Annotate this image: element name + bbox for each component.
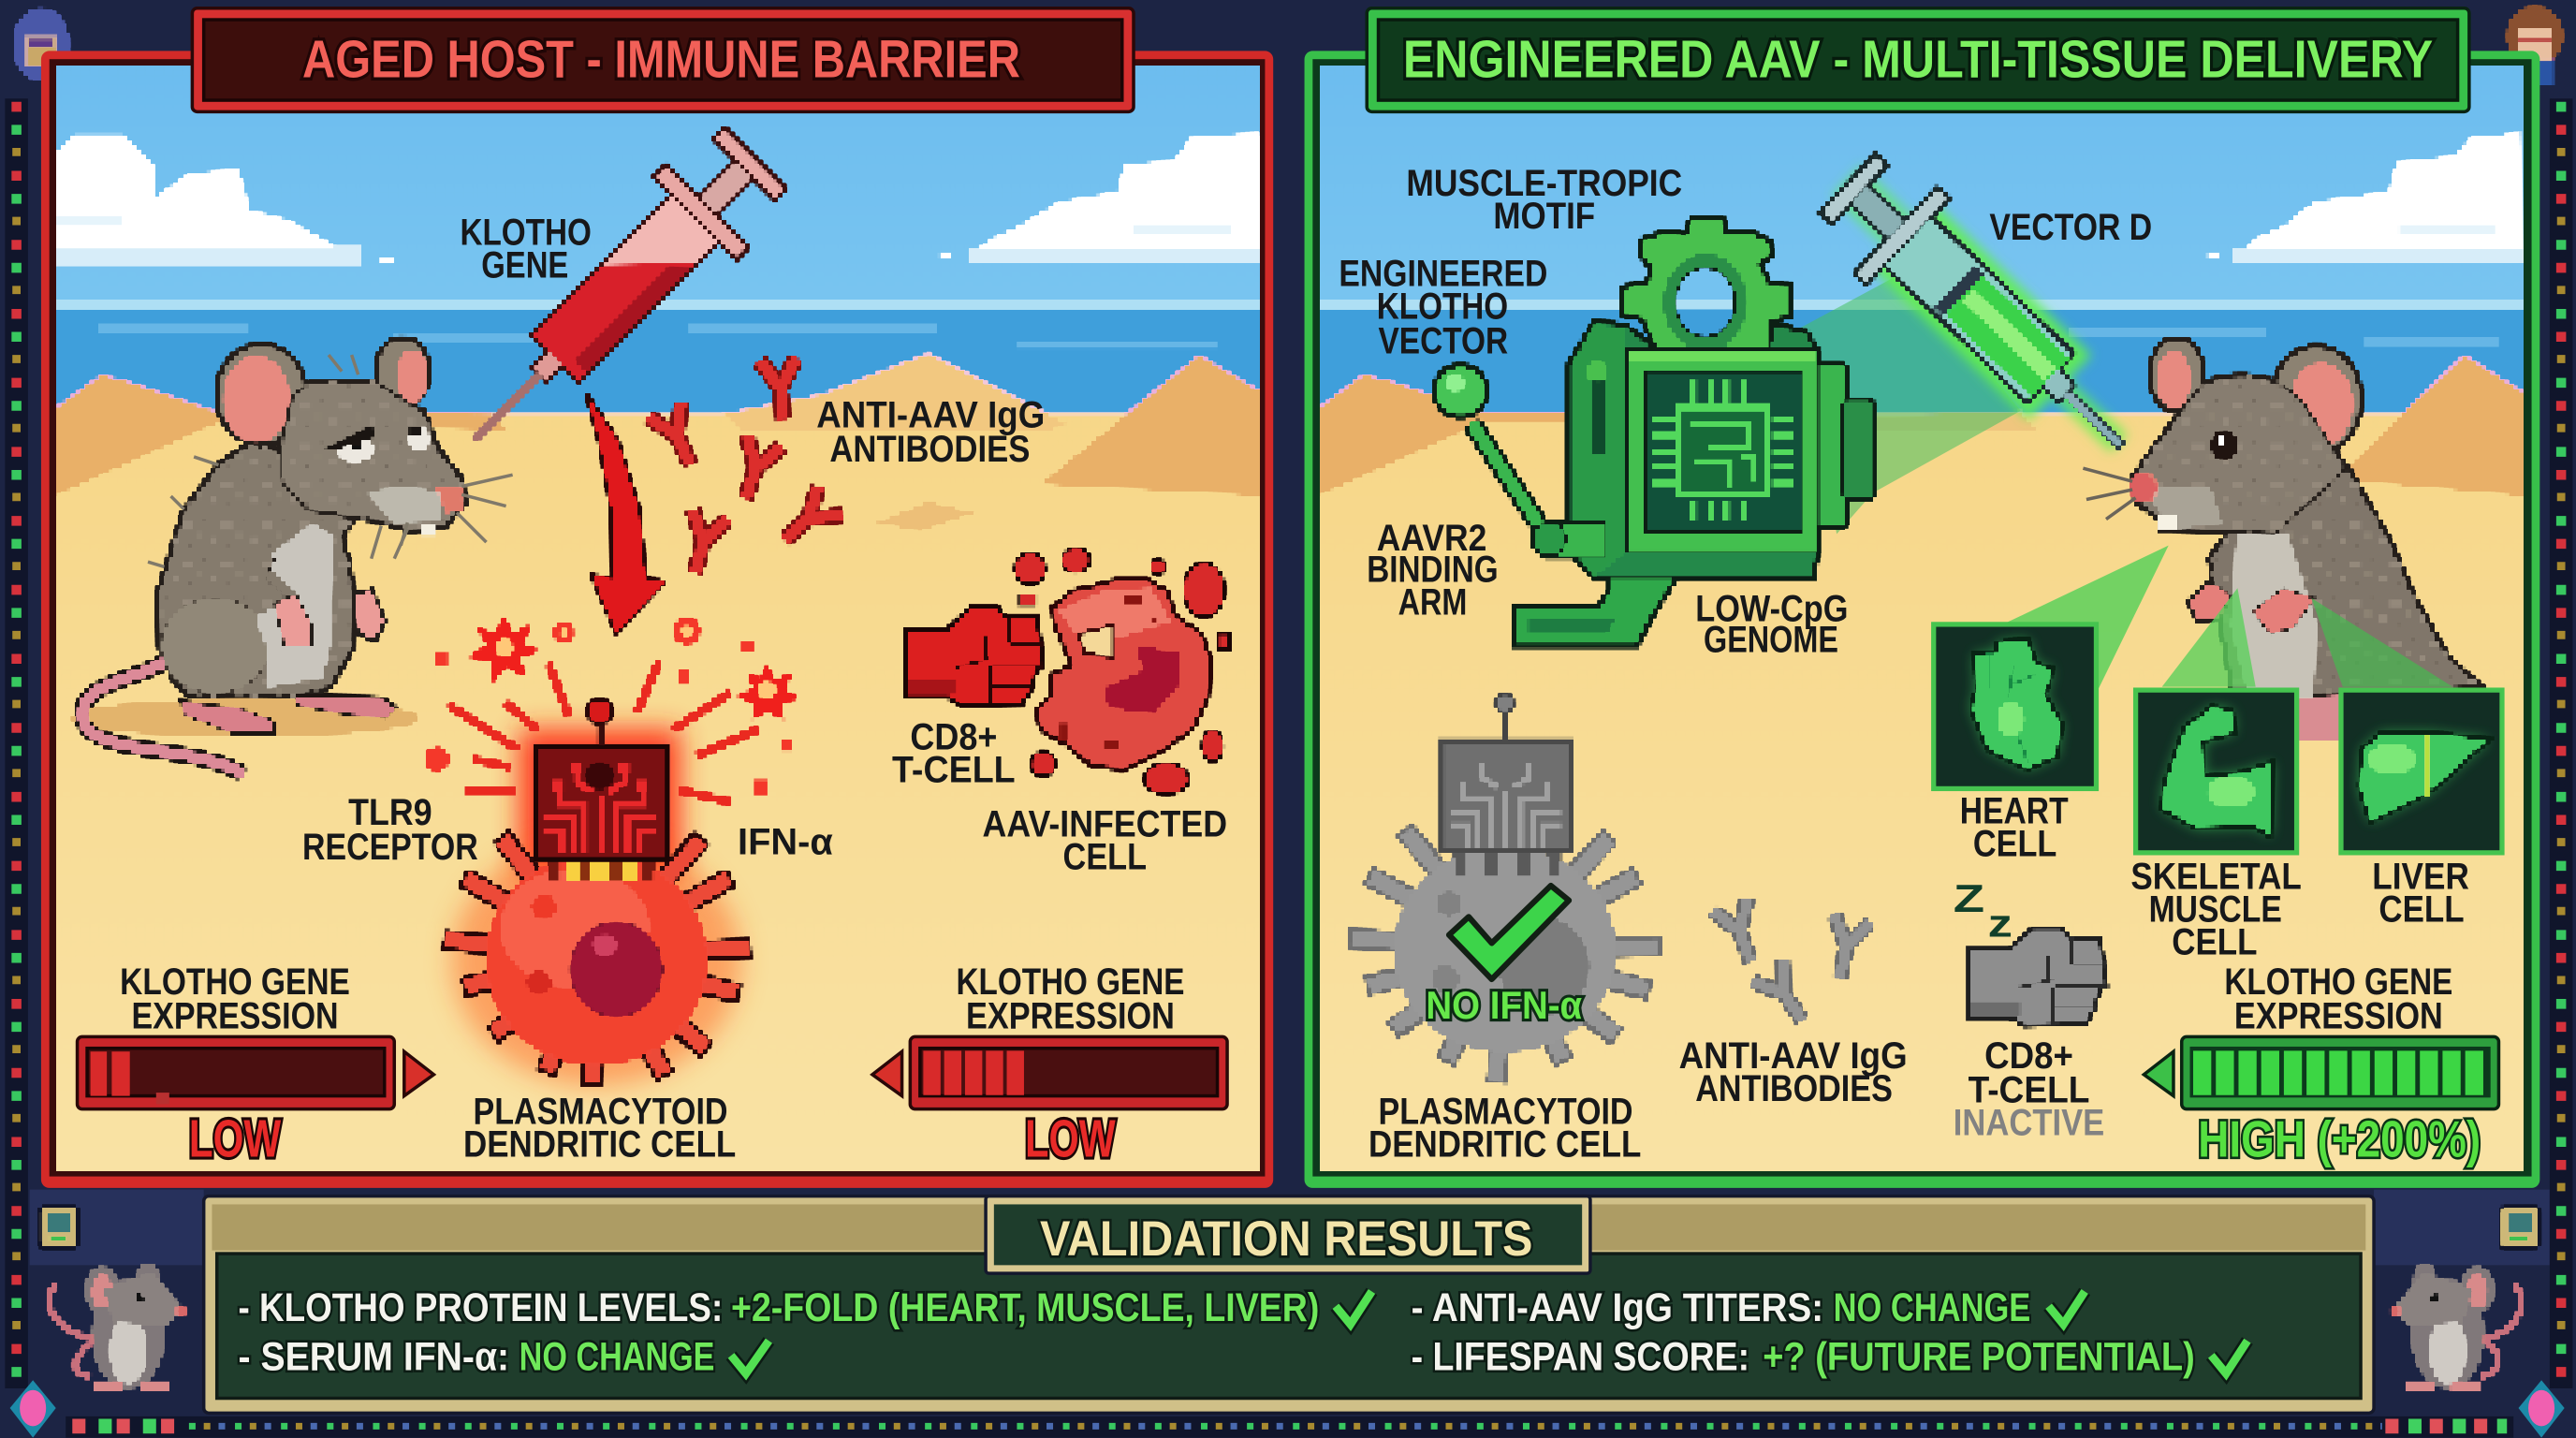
labels: engineered panel [1339, 163, 2481, 1168]
gray chip [1442, 695, 1571, 851]
bottom LED strip [66, 1416, 2513, 1438]
labels: engineered panel: DENDRITIC CELL [1368, 1124, 1641, 1166]
panel frame: left [41, 51, 1273, 1188]
labels: engineered panel: ANTIBODIES [1695, 1068, 1893, 1109]
labels: aged panel: RECEPTOR [302, 827, 478, 868]
heading plate [986, 1196, 1590, 1273]
labels: engineered panel: MUSCLE [2149, 889, 2282, 931]
row: serum IFN-alpha: - SERUM IFN-α: [239, 1335, 509, 1380]
icon: gray dendritic cell [1349, 695, 1661, 1083]
beams: rat to organs [1999, 546, 2169, 694]
labels: engineered panel: KLOTHO GENE [2224, 961, 2452, 1003]
gear [1623, 217, 1789, 352]
row: Klotho protein levels: +2-FOLD (HEART, MUSCLE, LIVER) [731, 1285, 1319, 1330]
avatar: top left [13, 8, 69, 81]
labels: engineered panel: AAVR2 [1377, 518, 1486, 559]
labels: aged panel: LOW [189, 1109, 281, 1168]
labels: engineered panel: CELL [2378, 889, 2465, 931]
icon: green syringe [1808, 141, 2162, 488]
icon: aged rat [72, 339, 465, 774]
heading plate: VALIDATION RESULTS [1040, 1211, 1532, 1267]
scene: left beach background [56, 66, 1260, 1171]
scene: right beach background [1319, 66, 2522, 1171]
labels: aged panel: KLOTHO GENE [956, 961, 1184, 1003]
arrow: curved red [587, 394, 666, 633]
panel: engineered AAV [1305, 51, 2539, 1188]
side boxes [30, 1190, 2550, 1265]
labels: engineered panel: VECTOR D [1989, 207, 2152, 248]
row: anti-AAV IgG titers: - ANTI-AAV IgG TITERS: [1412, 1285, 1823, 1330]
labels: aged panel: ANTI-AAV IgG [816, 394, 1045, 435]
icon: red antibodies [649, 359, 842, 577]
sparks [426, 618, 798, 794]
beams: lower rat to organs [2162, 588, 2452, 687]
labels: engineered panel: BINDING [1367, 549, 1499, 590]
icon: red plasmacytoid dendritic cell [426, 618, 798, 1086]
title: aged host [192, 8, 1134, 111]
labels: engineered panel: LIVER [2372, 856, 2469, 897]
right LED strip [2550, 98, 2572, 1388]
labels: aged panel: ANTIBODIES [829, 429, 1030, 470]
labels: engineered panel: HEART [1960, 790, 2069, 831]
row: lifespan score: +? (FUTURE POTENTIAL) [1763, 1335, 2195, 1380]
row: serum IFN-alpha [239, 1335, 768, 1380]
icon: red syringe [434, 118, 796, 479]
labels: engineered panel: CD8+ [1984, 1035, 2073, 1077]
labels: engineered panel: HIGH (+200%) [2198, 1111, 2481, 1168]
row: serum IFN-alpha: NO CHANGE [520, 1335, 714, 1380]
labels: engineered panel: PLASMACYTOID [1379, 1091, 1633, 1132]
labels: engineered panel: Z [1954, 876, 1984, 920]
labels: engineered panel: EXPRESSION [2234, 996, 2443, 1037]
bar: left Klotho expression [78, 1036, 433, 1109]
labels: engineered panel: MOTIF [1493, 196, 1595, 237]
labels: engineered panel: SKELETAL [2130, 856, 2302, 897]
panel: validation results [204, 1196, 2374, 1413]
icon: mini rat left [50, 1264, 185, 1392]
labels: aged panel: KLOTHO [460, 212, 592, 253]
labels: aged panel: TLR9 [348, 792, 432, 833]
row: anti-AAV IgG titers: NO CHANGE [1834, 1285, 2030, 1330]
labels: aged panel: T-CELL [892, 749, 1016, 790]
panel body [204, 1196, 2374, 1413]
green check [1449, 886, 1569, 979]
labels: aged panel: KLOTHO GENE [120, 961, 350, 1003]
labels: aged panel: IFN-α [738, 822, 833, 863]
labels: engineered panel: VECTOR [1379, 320, 1508, 361]
icon: gem left [10, 1380, 56, 1438]
tile: heart [1934, 624, 2096, 788]
syringe glow [1847, 181, 2119, 444]
whiskers: aged rat [148, 355, 513, 566]
icon: gem right [2519, 1380, 2565, 1438]
labels: engineered panel: LOW-CpG [1695, 588, 1848, 629]
icon: gray fist inactive T-cell [1969, 929, 2106, 1025]
cell body [444, 836, 751, 1086]
labels: aged panel: AAV-INFECTED [983, 803, 1227, 844]
panel: aged host [41, 51, 1273, 1188]
labels: engineered panel: GENOME [1704, 620, 1838, 661]
labels: engineered panel: ARM [1398, 581, 1467, 623]
labels: engineered panel: KLOTHO [1377, 286, 1508, 327]
chip [1679, 407, 1767, 494]
whiskers: healthy rat [2083, 468, 2136, 520]
right cylinder [1814, 365, 1847, 527]
foot [1515, 575, 1677, 646]
row: lifespan score: - LIFESPAN SCORE: [1412, 1335, 1749, 1380]
labels: engineered panel: CELL [2172, 922, 2257, 963]
glow [452, 729, 741, 1086]
labels: aged panel: CD8+ [910, 716, 997, 757]
icon: gray antibodies [1713, 899, 1870, 1030]
labels: aged panel: DENDRITIC CELL [463, 1124, 736, 1166]
label: no IFN-alpha: NO IFN-α [1426, 983, 1582, 1027]
avatar: top right [2507, 7, 2563, 84]
labels: engineered panel: ANTI-AAV IgG [1679, 1035, 1908, 1077]
bar: right Klotho expression in aged panel [872, 1036, 1227, 1109]
gray cell body [1349, 829, 1661, 1083]
left LED strip [5, 98, 28, 1388]
tile: skeletal muscle [2136, 690, 2297, 853]
housing [1569, 322, 1817, 577]
labels: aged panel: PLASMACYTOID [474, 1091, 728, 1132]
row: lifespan score [1412, 1335, 2247, 1380]
icon: red fist CD8+ T-cell [907, 608, 1044, 705]
labels: engineered panel: CELL [1973, 823, 2056, 864]
icon: mini console right [2500, 1208, 2539, 1247]
title: engineered AAV: ENGINEERED AAV - MULTI-TISSUE DELIVERY [1403, 29, 2433, 88]
labels: engineered panel: T-CELL [1969, 1070, 2089, 1111]
labels: aged panel: EXPRESSION [966, 996, 1175, 1037]
icon: mini rat right [2391, 1264, 2522, 1392]
title: engineered AAV [1367, 8, 2469, 111]
labels: engineered panel: MUSCLE-TROPIC [1406, 163, 1682, 204]
labels: engineered panel: ENGINEERED [1339, 253, 1547, 294]
clouds [57, 133, 1260, 265]
icon: mini console left [39, 1208, 78, 1247]
labels: aged panel [120, 212, 1227, 1168]
lever [1472, 424, 1541, 527]
panel frame: right [1305, 51, 2539, 1188]
labels: aged panel: EXPRESSION [131, 996, 339, 1037]
chip: TLR9 receptor [537, 700, 666, 858]
row: Klotho protein levels: - KLOTHO PROTEIN LEVELS: [239, 1285, 723, 1330]
labels: aged panel: CELL [1063, 836, 1147, 877]
beam: machine to syringe [1799, 271, 2021, 534]
labels: aged panel: GENE [481, 245, 568, 286]
row: Klotho protein levels [239, 1285, 1372, 1330]
labels: aged panel: LOW [1025, 1109, 1116, 1168]
bar: high Klotho expression [2144, 1036, 2498, 1109]
tile: liver [2341, 690, 2502, 853]
icon: green vector machine [1435, 217, 1873, 646]
icon: healthy rat [2130, 339, 2481, 740]
row: anti-AAV IgG titers [1412, 1285, 2085, 1330]
title: aged host: AGED HOST - IMMUNE BARRIER [302, 29, 1020, 88]
labels: engineered panel: z [1988, 901, 2012, 945]
icon: AAV-infected cell [1016, 549, 1229, 794]
syringe body [1808, 141, 2162, 488]
labels: engineered panel: INACTIVE [1954, 1103, 2104, 1144]
burst rays [448, 662, 757, 801]
